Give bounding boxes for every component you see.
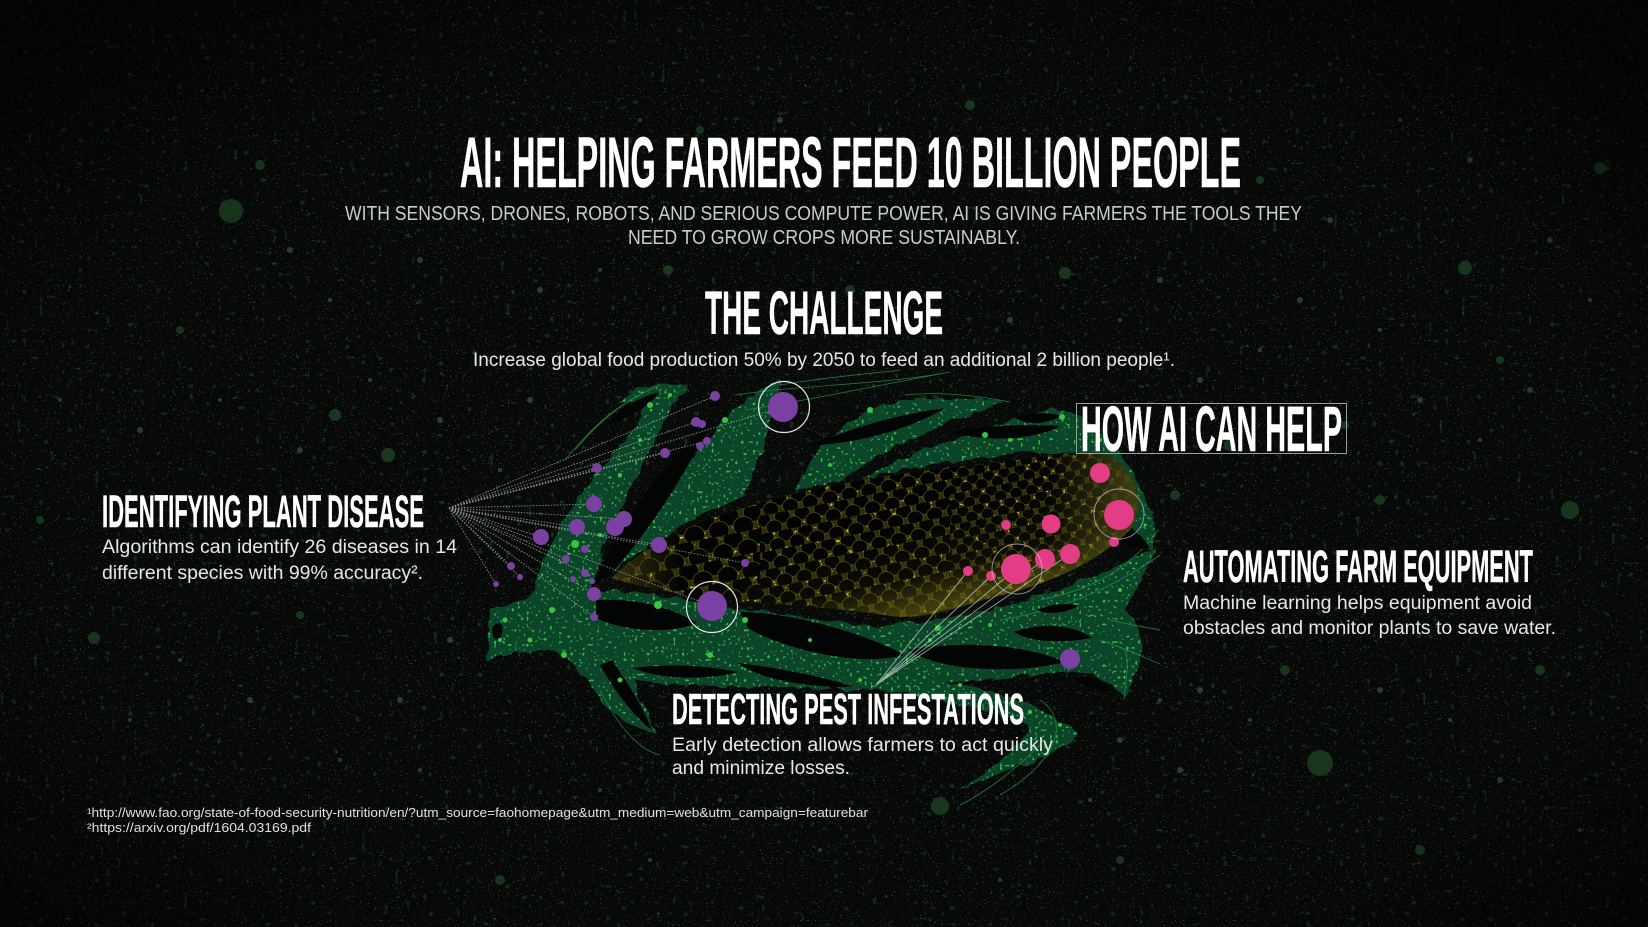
callout: detecting pest infestations: and minimize losses.	[672, 758, 850, 779]
callout: identifying plant disease: Algorithms can identify 26 diseases in 14	[102, 537, 457, 558]
callout: detecting pest infestations: DETECTING PEST INFESTATIONS	[672, 685, 1024, 734]
callout: automating farm equipment: Machine learning helps equipment avoid	[1183, 593, 1532, 614]
footnotes: ¹http://www.fao.org/state-of-food-security-nutrition/en/?utm_source=faohomepage&utm_medium=web&utm_campaign=featurebar	[87, 805, 869, 820]
heading: how AI can help	[1076, 393, 1346, 465]
bright leaf spots	[498, 393, 1146, 727]
highlighted pink marker, lower	[992, 544, 1042, 594]
text: HOW AI CAN HELP	[1081, 393, 1342, 465]
callout: identifying plant disease	[102, 486, 457, 584]
callout: detecting pest infestations: Early detection allows farmers to act quickly	[672, 735, 1054, 756]
corn cob	[612, 452, 1138, 617]
callout: automating farm equipment	[1183, 541, 1556, 639]
subtitle	[345, 203, 1302, 249]
leaf veins	[565, 370, 1160, 805]
callout: detecting pest infestations	[672, 685, 1054, 779]
callout: identifying plant disease: different species with 99% accuracy².	[102, 563, 423, 584]
pointer lines: plant disease	[449, 396, 783, 617]
footnotes: ²https://arxiv.org/pdf/1604.03169.pdf	[87, 820, 311, 835]
highlighted purple marker, top	[758, 382, 810, 432]
text: THE CHALLENGE	[705, 279, 943, 347]
corn illustration	[486, 370, 1160, 805]
pointer lines: pest infestations	[876, 554, 1070, 685]
purple disease markers	[493, 391, 1080, 669]
highlighted purple marker, bottom	[686, 582, 738, 632]
callout: identifying plant disease: IDENTIFYING PLANT DISEASE	[102, 486, 424, 537]
highlighted pink marker, right	[1094, 489, 1144, 539]
callout: automating farm equipment: obstacles and monitor plants to save water.	[1183, 618, 1556, 639]
pink pest markers	[963, 463, 1119, 581]
footnotes	[87, 805, 869, 835]
leaf dark slits	[492, 392, 1150, 730]
challenge text: Increase global food production 50% by 2050 to feed an additional 2 billion people¹.	[473, 350, 1175, 371]
subtitle: NEED TO GROW CROPS MORE SUSTAINABLY.	[628, 227, 1020, 249]
subtitle: WITH SENSORS, DRONES, ROBOTS, AND SERIOUS COMPUTE POWER, AI IS GIVING FARMERS THE TOOLS THEY	[345, 203, 1302, 225]
leaves	[486, 378, 1156, 790]
